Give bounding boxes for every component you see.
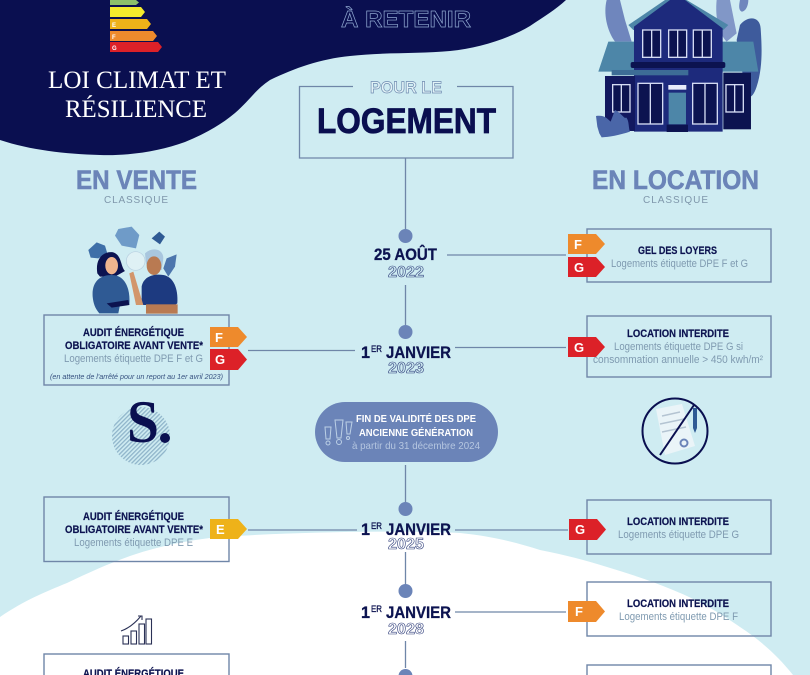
- tag F: [568, 601, 605, 622]
- energy label scale icon: G: [112, 46, 117, 52]
- date: 1er janvier 2025: [361, 520, 451, 553]
- timeline: [248, 158, 568, 675]
- panel: gel des loyers: [568, 229, 771, 282]
- title: RÉSILIENCE: [65, 95, 207, 123]
- icon: growth chart: [121, 616, 152, 644]
- date: 1er janvier 2023: 1: [361, 343, 370, 362]
- panel: bottom right: [587, 665, 771, 675]
- tag G: G: [575, 522, 585, 537]
- panel: location interdite G 450: [568, 316, 771, 377]
- panel: audit F G: [44, 315, 247, 385]
- dark header wave: [0, 0, 566, 155]
- heading: en vente: CLASSIQUE: [104, 195, 168, 206]
- date: 1er janvier 2023: JANVIER: [386, 343, 451, 362]
- heading: en vente: EN VENTE: [76, 165, 197, 195]
- panel: audit bottom: [44, 654, 229, 675]
- panel: location interdite G 450: LOCATION INTERDITE: [627, 328, 729, 340]
- heading: en vente: [76, 165, 197, 206]
- heading: à retenir: À RETENIR: [341, 5, 471, 32]
- date: 1er janvier 2025: ER: [371, 521, 382, 531]
- date: 1er janvier 2023: 2023: [388, 360, 424, 377]
- energy label scale icon: [110, 0, 162, 52]
- tag E: [210, 519, 247, 539]
- illustration: house: [596, 0, 762, 137]
- date: 25 août 2022: [374, 245, 438, 281]
- tag G: G: [574, 340, 584, 355]
- tag F: F: [574, 237, 582, 252]
- panel: audit F G: AUDIT ÉNERGÉTIQUE: [83, 326, 184, 339]
- panel: location interdite F: LOCATION INTERDITE: [627, 598, 729, 610]
- white wave bottom: [0, 532, 793, 675]
- panel: location interdite G 450: consommation annuelle > 450 kwh/m²: [593, 354, 763, 366]
- logo: S.: S: [127, 389, 159, 455]
- panel: audit E: Logements étiquette DPE E: [74, 537, 193, 549]
- panel: audit F G: Logements étiquette DPE F et G: [64, 353, 203, 365]
- tag F: [210, 327, 247, 347]
- illustration: two people talking: [88, 227, 178, 314]
- tag G: [210, 349, 247, 370]
- tag G: G: [574, 260, 584, 275]
- panel: location interdite G: [569, 500, 771, 554]
- title: [48, 67, 226, 123]
- heading: en location: EN LOCATION: [592, 165, 759, 195]
- heading: en location: CLASSIQUE: [643, 195, 708, 206]
- tag G: [569, 519, 606, 540]
- panel: pour le logement: LOGEMENT: [317, 102, 496, 141]
- energy label scale icon: E: [112, 23, 116, 29]
- panel: location interdite G 450: Logements étiquette DPE G si: [614, 341, 743, 353]
- tag F: [568, 234, 605, 254]
- panel: gel des loyers: Logements étiquette DPE F et G: [611, 258, 748, 270]
- date: 1er janvier 2025: 1: [361, 520, 370, 539]
- date: 25 août 2022: 25 AOÛT: [374, 245, 438, 264]
- panel: pour le logement: POUR LE: [370, 78, 442, 97]
- callout: fin de validité: à partir du 31 décembre 2024: [352, 440, 480, 452]
- panel: audit E: OBLIGATOIRE AVANT VENTE*: [65, 524, 204, 536]
- date: 1er janvier 2028: [361, 603, 451, 638]
- panel: location interdite F: Logements étiquette DPE F: [619, 611, 738, 623]
- date: 1er janvier 2028: 2028: [388, 621, 424, 638]
- logo: S.: [112, 389, 170, 465]
- panel: gel des loyers: GEL DES LOYERS: [638, 245, 717, 257]
- icon: exclamation marks: [325, 420, 352, 445]
- tag F: F: [575, 604, 583, 619]
- panel: audit E: AUDIT ÉNERGÉTIQUE: [83, 510, 184, 523]
- date: 1er janvier 2023: ER: [371, 344, 382, 354]
- callout: fin de validité: [315, 402, 498, 462]
- heading: en location: [592, 165, 759, 206]
- date: 1er janvier 2028: 1: [361, 603, 370, 622]
- tag G: [568, 257, 605, 277]
- panel: audit E: [44, 497, 247, 562]
- panel: audit F G: (en attente de l'arrêté pour un report au 1er avril 2023): [50, 372, 223, 381]
- tag G: [568, 337, 605, 357]
- date: 1er janvier 2025: 2025: [388, 536, 424, 553]
- panel: audit F G: OBLIGATOIRE AVANT VENTE*: [65, 340, 204, 352]
- callout: fin de validité: ANCIENNE GÉNÉRATION: [359, 426, 473, 439]
- panel: location interdite G: Logements étiquette DPE G: [618, 529, 739, 541]
- tag E: E: [216, 522, 225, 537]
- date: 1er janvier 2028: JANVIER: [386, 603, 451, 622]
- tag G: G: [215, 352, 225, 367]
- panel: pour le logement: [300, 78, 513, 158]
- callout: fin de validité: FIN DE VALIDITÉ DES DPE: [356, 412, 476, 425]
- energy label scale icon: F: [112, 35, 116, 41]
- icon: crossed-out contract: [642, 398, 708, 464]
- date: 1er janvier 2023: [361, 343, 451, 377]
- tag F: F: [215, 330, 223, 345]
- date: 1er janvier 2028: ER: [371, 604, 382, 614]
- panel: location interdite G: LOCATION INTERDITE: [627, 516, 729, 528]
- date: 25 août 2022: 2022: [388, 264, 424, 281]
- date: 1er janvier 2025: JANVIER: [386, 520, 451, 539]
- panel: location interdite F: [568, 582, 771, 636]
- title: LOI CLIMAT ET: [48, 67, 226, 94]
